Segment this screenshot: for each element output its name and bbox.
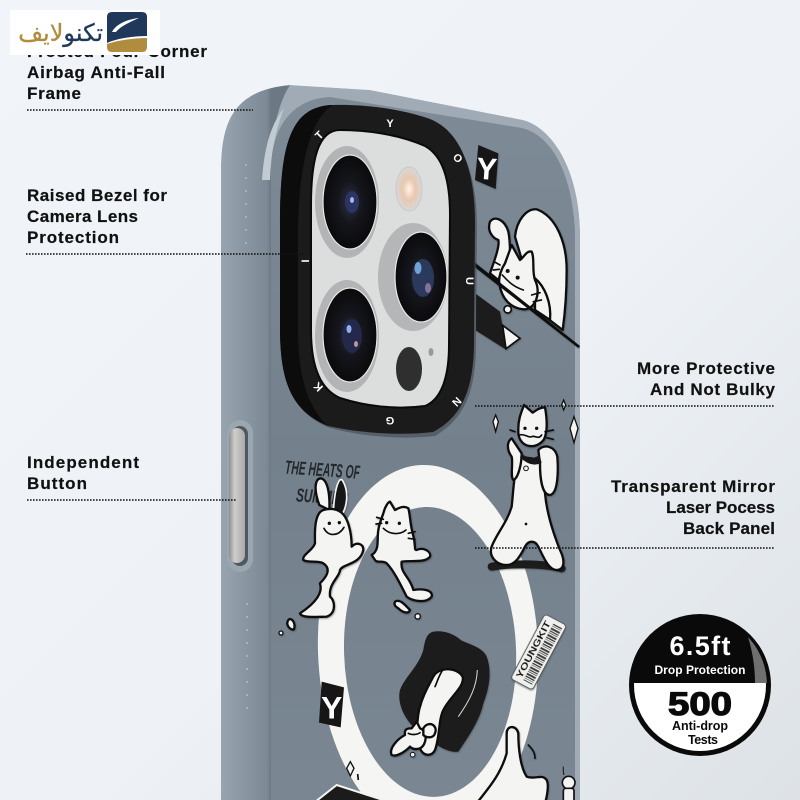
bezel lettering: K [312, 379, 326, 393]
callout: independent button: Button [27, 474, 87, 493]
side band [221, 85, 290, 800]
callout: raised bezel: Raised Bezel for [27, 186, 167, 205]
bezel side gradient [280, 105, 333, 426]
logo [10, 10, 160, 55]
bezel outer [280, 105, 475, 434]
sticker: melting cat [372, 502, 432, 619]
callout: airbag frame: Airbag Anti-Fall [27, 63, 165, 82]
callout: independent button: Independent [27, 453, 139, 472]
callout: raised bezel [26, 186, 305, 254]
sticker: Y square: Y [475, 152, 498, 187]
text: the heats of summer: THE HEATS OF [284, 458, 361, 484]
callout: back panel [475, 477, 775, 548]
sticker: Y on ring: Y [321, 689, 342, 725]
bezel lettering: G [386, 414, 394, 426]
sticker: bottom black label [316, 784, 380, 800]
sticker: standing cat [491, 405, 563, 570]
callout: airbag frame [27, 42, 253, 110]
sticker: white triangle flag [476, 294, 520, 350]
camera flash [396, 167, 422, 211]
callout: airbag frame: Frame [27, 84, 81, 103]
stickers traced in 3x crop coordinates (lower) [279, 400, 578, 800]
sticker: sleeping cat on the slope [475, 209, 580, 348]
bezel lettering: I [300, 259, 312, 263]
sticker: black blob with creature [391, 631, 490, 757]
sticker: Y on ring [319, 682, 344, 727]
camera module [280, 105, 477, 438]
bezel lettering: T [313, 129, 327, 142]
side button [227, 420, 253, 572]
sticker: rabbit [279, 478, 363, 635]
badge: drop protection: 6.5ft [670, 631, 730, 661]
lens: top left [315, 146, 379, 258]
callout: raised bezel: Protection [27, 228, 119, 247]
sticker: sparkles [347, 400, 578, 780]
back panel [271, 97, 575, 800]
callout: more protective: And Not Bulky [650, 380, 776, 399]
sticker: bottom creature [477, 727, 548, 800]
callout: back panel: Transparent Mirror [611, 477, 775, 496]
microphone [428, 348, 434, 356]
callout: raised bezel: Camera Lens [27, 207, 138, 226]
badge: drop protection: Anti-drop [672, 719, 728, 733]
case body [221, 85, 580, 800]
sticker: small figure [562, 767, 575, 800]
lens: bottom left [315, 280, 379, 392]
sticker: youngkit barcode [511, 614, 567, 690]
text: the heats of summer [286, 460, 360, 505]
badge: drop protection: Drop Protection [654, 663, 746, 677]
badge: drop protection: Tests [688, 733, 718, 747]
callout: airbag frame: Frosted Four-Corner [27, 42, 207, 61]
callout: independent button [27, 453, 236, 500]
bezel lettering [300, 118, 475, 426]
side highlight [262, 108, 284, 180]
callout: more protective: More Protective [637, 359, 775, 378]
callout: back panel: Back Panel [683, 519, 775, 538]
callout: back panel: Laser Pocess [666, 498, 775, 517]
side grip dots [245, 164, 248, 709]
lens plate [311, 130, 450, 408]
bezel lettering: N [449, 394, 463, 408]
sticker: youngkit barcode: YOUNGKIT [514, 619, 553, 680]
logo wordmark: تكنولايف [18, 19, 103, 47]
badge: drop protection: 500 [668, 686, 732, 722]
bezel lettering: O [450, 151, 465, 166]
lidar sensor [396, 347, 422, 391]
lens: right [378, 223, 448, 331]
phone with case [221, 85, 580, 800]
bezel lettering: Y [386, 118, 394, 130]
logo icon [107, 12, 147, 52]
text: the heats of summer: SUMMER [295, 485, 349, 510]
bezel lettering: U [463, 277, 475, 285]
stickers traced in 3x crop coordinates (upper) [475, 145, 520, 350]
callout: more protective [475, 359, 776, 406]
magnetic ring [312, 461, 544, 800]
raised bezel shadow [303, 154, 477, 438]
badge: drop protection [625, 610, 775, 756]
